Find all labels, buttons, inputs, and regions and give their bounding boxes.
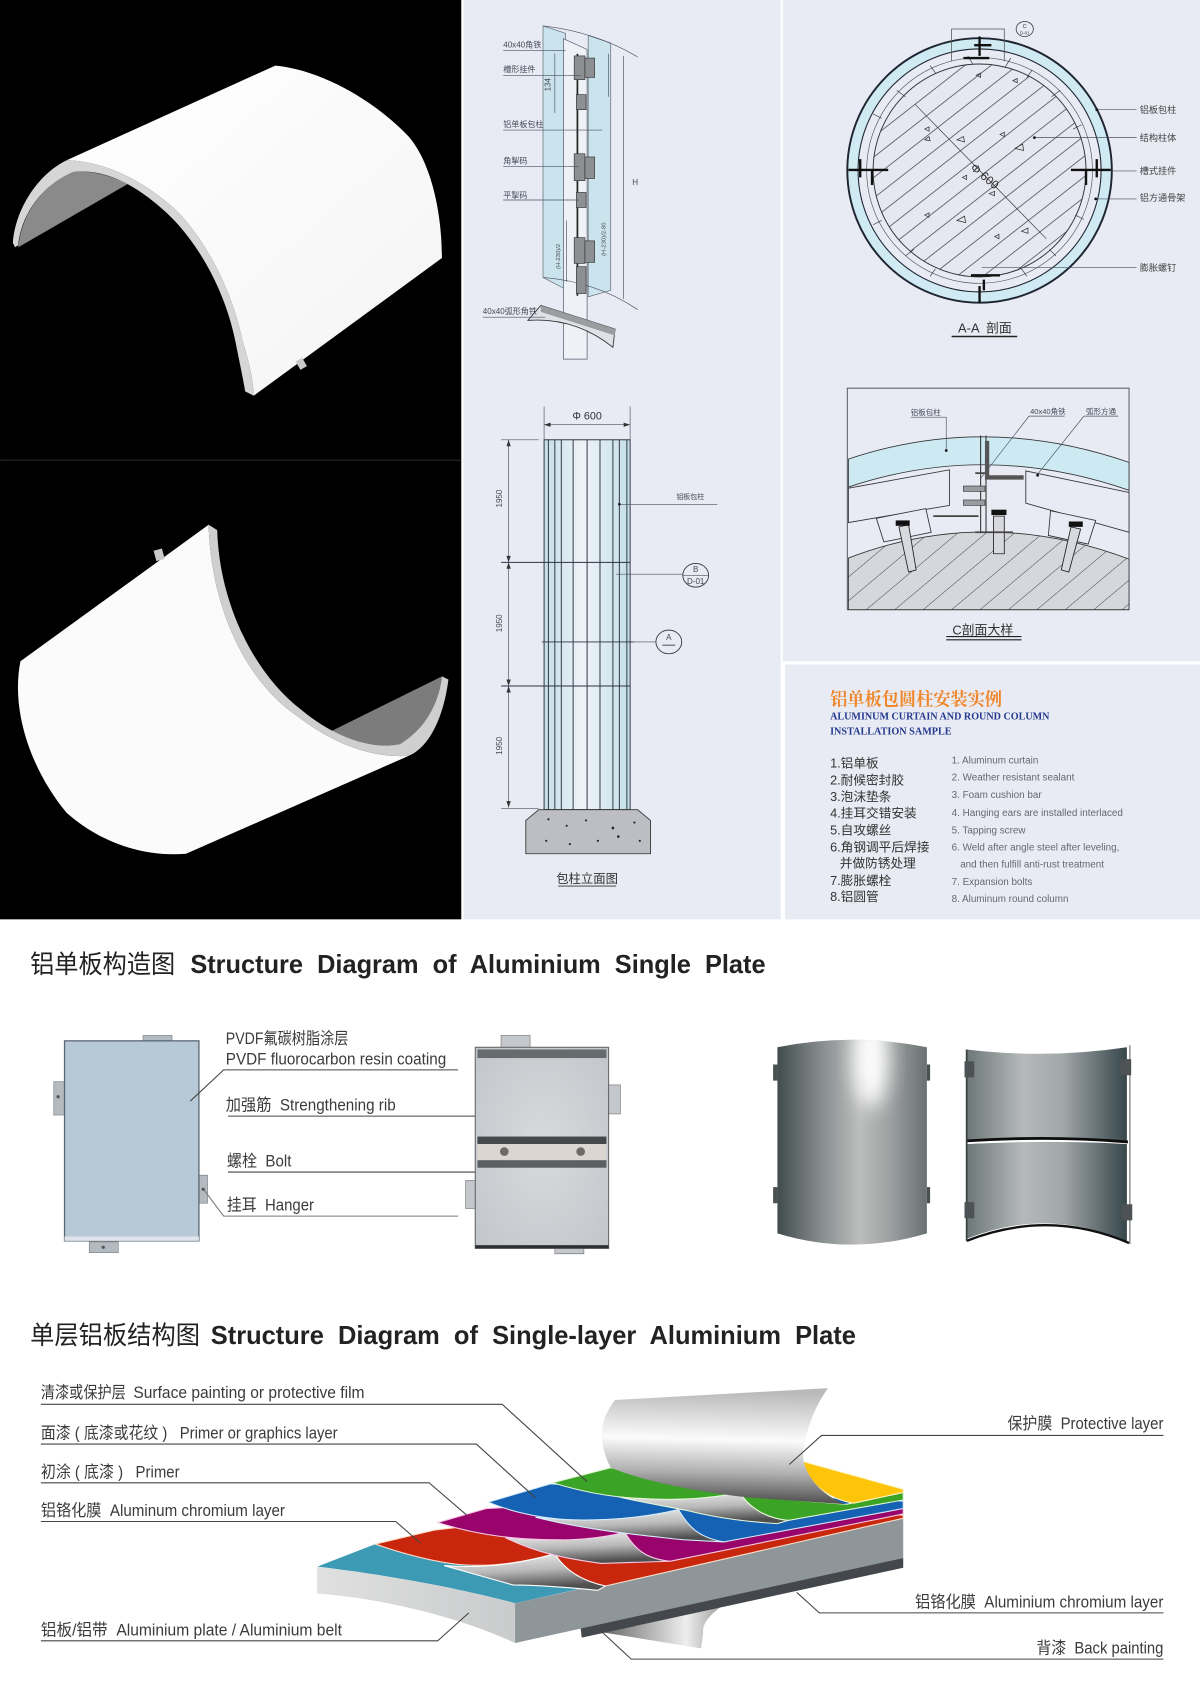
heading: structure diagram of aluminium single plate: 铝单板构造图	[30, 950, 175, 979]
labels: plate structure: 螺栓 Bolt	[227, 1152, 292, 1171]
panel: black 3D renders	[0, 0, 461, 919]
labels: layers left: 初涂 ( 底漆 ) Primer	[41, 1462, 180, 1481]
callout A: A	[666, 633, 672, 642]
caption: elevation: 包柱立面图	[556, 871, 618, 886]
list: English: 2. Weather resistant sealant	[952, 773, 1075, 784]
list: English	[952, 755, 1123, 905]
labels: layers right: 背漆 Back painting	[1037, 1639, 1163, 1658]
labels: plate structure: 加强筋 Strengthening rib	[226, 1096, 396, 1115]
labels: plate structure: PVDF氟碳树脂涂层	[226, 1029, 348, 1048]
back peel	[602, 1600, 731, 1648]
section A-A circle	[847, 22, 1112, 303]
yellow layer	[802, 1461, 903, 1503]
list: Chinese: 4.挂耳交错安装	[830, 806, 917, 821]
labels: layers left: 铝铬化膜 Aluminum chromium layer	[41, 1501, 285, 1520]
column bracket exploded drawing: 134	[544, 77, 553, 91]
list: English: and then fulfill anti-rust treatment	[960, 860, 1104, 871]
red layer	[375, 1505, 903, 1586]
labels: plate structure: PVDF fluorocarbon resin coating	[226, 1050, 446, 1069]
labels: layers left: 清漆或保护层	[41, 1383, 126, 1402]
section A-A circle: C	[1023, 24, 1027, 30]
dark strip	[581, 1558, 903, 1638]
list: Chinese: 7.膨胀螺栓	[830, 874, 892, 888]
red peel	[444, 1554, 605, 1590]
column elevation: 钼板包柱	[676, 492, 704, 501]
list: English: 3. Foam cushion bar	[952, 790, 1042, 801]
list: English: 4. Hanging ears are installed interlaced	[952, 808, 1123, 819]
column elevation	[495, 406, 717, 886]
icon: upper half-cylinder render	[13, 66, 442, 396]
labels: layers left: 铝板/铝带 Aluminium plate / Aluminium belt	[41, 1620, 342, 1639]
icon: lower half-cylinder render	[18, 525, 448, 854]
labels: layers right: 保护膜 Protective layer	[1008, 1414, 1164, 1433]
bracket labels: 角掣码	[503, 155, 527, 165]
list: English: 7. Expansion bolts	[952, 877, 1032, 888]
callout B D-01: D-01	[687, 577, 705, 586]
icon: front aluminium plate	[54, 1035, 208, 1253]
labels: plate structure: 挂耳 Hanger	[227, 1196, 314, 1215]
heading: installation sample: ALUMINUM CURTAIN AND ROUND COLUMN	[830, 711, 1050, 722]
heading: structure diagram of single-layer aluminium plate: Structure Diagram of Single-layer Aluminium Plate	[211, 1322, 856, 1350]
labels: layers left	[41, 1383, 587, 1641]
bracket labels: 40x40弧形角铁	[483, 306, 537, 316]
section A-A labels: 槽式挂件	[1140, 165, 1176, 176]
list: Chinese	[830, 757, 930, 904]
panel: column drawings	[463, 0, 781, 919]
heading: structure diagram of single-layer aluminium plate: 单层铝板结构图	[30, 1321, 200, 1350]
panel: installation sample text	[785, 665, 1200, 919]
heading: installation sample: 铝单板包圆柱安装实例	[830, 689, 1002, 709]
section A-A circle: D-01	[1020, 30, 1030, 35]
column bracket exploded drawing: (H-230)/2	[556, 244, 562, 269]
bracket labels: 平掣码	[503, 190, 527, 200]
list: Chinese: 1.铝单板	[830, 757, 879, 771]
column bracket exploded drawing: H	[632, 178, 638, 187]
heading: structure diagram of aluminium single plate: Structure Diagram of Aluminium Single Plate	[190, 951, 766, 979]
detail C drawing: 40x40角铁	[1030, 406, 1066, 416]
list: Chinese: 2.耐候密封胶	[830, 772, 904, 787]
icon: back aluminium plate	[466, 1035, 620, 1254]
bracket labels	[483, 39, 602, 317]
section A-A labels: 膨胀螺钉	[1140, 262, 1176, 273]
list: English: 5. Tapping screw	[952, 825, 1026, 836]
purple peel	[505, 1532, 670, 1563]
side face	[317, 1567, 515, 1643]
section A-A circle: Φ 600	[968, 161, 1002, 192]
column elevation: 1950	[495, 736, 504, 755]
section A-A labels	[982, 104, 1185, 273]
caption: detail C	[946, 622, 1022, 640]
labels: plate structure	[190, 1029, 506, 1216]
column elevation: 1950	[495, 614, 504, 632]
detail C drawing: 弧形方通	[1086, 406, 1117, 416]
column bracket exploded drawing	[483, 26, 638, 359]
teal aluminium top	[317, 1544, 645, 1603]
list: English: 1. Aluminum curtain	[952, 755, 1038, 766]
green layer	[553, 1468, 903, 1520]
bracket labels: 铝单板包柱	[503, 119, 543, 129]
list: Chinese: 5.自攻螺丝	[830, 823, 891, 837]
list: English: 6. Weld after angle steel after leveling,	[952, 843, 1119, 854]
bracket labels: 槽形挂件	[503, 64, 535, 74]
labels: layers right	[601, 1414, 1164, 1659]
blue layer	[488, 1484, 903, 1542]
section A-A labels: 铝方通骨架	[1140, 192, 1185, 203]
list: Chinese: 3.泡沫垫条	[830, 789, 892, 804]
panel: sections	[783, 0, 1200, 661]
purple layer	[438, 1500, 903, 1561]
labels: layers left: Surface painting or protective film	[133, 1383, 365, 1402]
callout A	[634, 630, 682, 654]
diagram: layered aluminium plate	[317, 1388, 903, 1648]
icon: curved panel back	[965, 1045, 1132, 1244]
list: Chinese: 8.铝圆管	[830, 890, 879, 904]
section A-A labels: 铝板包柱	[1140, 104, 1176, 115]
icon: curved panel front	[773, 1040, 930, 1245]
blue peel	[535, 1510, 724, 1542]
detail C drawing: 铝板包柱	[911, 407, 941, 417]
column elevation: 1950	[495, 489, 504, 508]
heading: installation sample	[830, 689, 1050, 737]
caption: detail C: C剖面大样	[952, 622, 1013, 637]
green peel	[618, 1492, 788, 1524]
concrete base	[526, 810, 651, 854]
list: English: 8. Aluminum round column	[952, 894, 1069, 905]
column bracket exploded drawing: (H-230)/2-80	[601, 222, 607, 256]
callout B D-01	[616, 563, 709, 587]
bracket labels: 40x40角铁	[503, 39, 541, 49]
detail C drawing	[847, 388, 1129, 610]
section A-A labels: 结构柱体	[1140, 132, 1176, 143]
list: Chinese: 并做防锈处理	[840, 856, 916, 871]
heading: installation sample: INSTALLATION SAMPLE	[830, 726, 952, 737]
list: Chinese: 6.角钢调平后焊接	[830, 840, 930, 855]
column elevation: Φ 600	[572, 410, 602, 422]
labels: layers right: 铝铬化膜 Aluminium chromium layer	[915, 1593, 1164, 1612]
callout B D-01: B	[693, 565, 698, 574]
right face	[515, 1518, 903, 1643]
protective film	[602, 1388, 846, 1504]
caption: A-A section: A-A 剖面	[958, 320, 1012, 335]
labels: layers left: 面漆 ( 底漆或花纹 ) Primer or graphics layer	[41, 1424, 338, 1443]
